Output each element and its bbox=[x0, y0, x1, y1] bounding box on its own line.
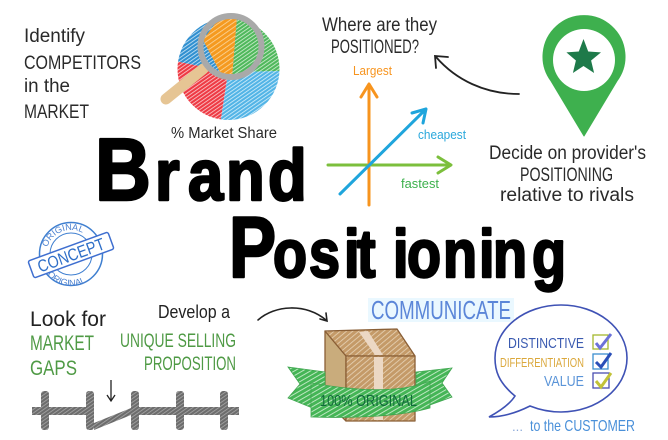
magnifier handle bbox=[166, 69, 203, 99]
bubble text: differentiation: DIFFERENTIATION bbox=[500, 355, 584, 370]
speech bubble bbox=[489, 305, 627, 417]
text: decide on positioning: relative to rivals bbox=[500, 185, 634, 206]
text: identify competitors: Identify bbox=[24, 26, 85, 47]
text: to the customer: ... bbox=[512, 419, 523, 434]
checkbox: value bbox=[593, 373, 611, 388]
text: decide on positioning: Decide on provider's bbox=[489, 143, 646, 164]
text: where are they positioned: POSITIONED? bbox=[331, 37, 419, 58]
stamp: original concept bbox=[28, 222, 114, 286]
bubble text: value: VALUE bbox=[544, 373, 584, 390]
text: decide on positioning: POSITIONING bbox=[520, 165, 613, 186]
text: where are they positioned bbox=[322, 15, 437, 58]
magnifier ring bbox=[200, 16, 262, 77]
text: look for market gaps bbox=[30, 308, 106, 380]
magnifier lens content bbox=[204, 19, 242, 74]
text: identify competitors: MARKET bbox=[24, 102, 89, 123]
title bbox=[95, 120, 566, 296]
icon: down arrow to gap bbox=[107, 380, 115, 401]
text: unique selling proposition: UNIQUE SELLING bbox=[120, 331, 236, 352]
label: market share: % Market Share bbox=[171, 125, 277, 142]
text: communicate: COMMUNICATE bbox=[371, 295, 511, 325]
axis: fastest bbox=[328, 157, 451, 173]
icon: map pin with star bbox=[543, 16, 625, 136]
label: cheapest: cheapest bbox=[418, 127, 466, 142]
title: Brand bbox=[95, 120, 307, 219]
icon: fence with gap bbox=[32, 391, 239, 430]
text: to the customer bbox=[512, 418, 635, 435]
axis: cheapest bbox=[340, 109, 426, 194]
text: look for market gaps: MARKET bbox=[30, 332, 94, 355]
arrow: curved to box bbox=[258, 308, 327, 321]
icon: cardboard box with ribbon bbox=[288, 329, 452, 421]
text: identify competitors: COMPETITORS bbox=[24, 53, 141, 74]
text: unique selling proposition: PROPOSITION bbox=[144, 354, 236, 375]
pie slices bbox=[178, 22, 280, 120]
label: fastest: fastest bbox=[401, 176, 439, 191]
text: where are they positioned: Where are they bbox=[322, 15, 437, 36]
text: communicate: ... bbox=[514, 306, 533, 322]
arrow: pin to question bbox=[435, 56, 519, 94]
text: to the customer: to the CUSTOMER bbox=[530, 418, 635, 435]
text: unique selling proposition: Develop a bbox=[158, 302, 231, 322]
pie chart with magnifying glass bbox=[166, 10, 285, 125]
checkbox: distinctive bbox=[593, 334, 611, 349]
icon: cardboard box with ribbon: 100% ORIGINAL bbox=[320, 393, 417, 410]
text: decide on positioning bbox=[489, 143, 646, 206]
title: Positioning bbox=[229, 199, 566, 296]
box bbox=[325, 329, 415, 421]
text: identify competitors: in the bbox=[24, 76, 70, 97]
text: look for market gaps: GAPS bbox=[30, 357, 77, 380]
text: look for market gaps: Look for bbox=[30, 308, 106, 331]
label: largest: Largest bbox=[353, 64, 392, 78]
positioning axes chart bbox=[328, 84, 451, 205]
ribbon bbox=[288, 367, 325, 412]
checkbox: differentiation bbox=[593, 353, 611, 369]
text: identify competitors bbox=[24, 26, 141, 123]
text: unique selling proposition bbox=[120, 302, 236, 375]
stamp: original concept: ORIGINAL bbox=[48, 272, 86, 286]
bubble text: distinctive: DISTINCTIVE bbox=[508, 335, 584, 352]
stamp: original concept: ORIGINAL bbox=[42, 224, 82, 246]
stamp: original concept: CONCEPT bbox=[35, 235, 107, 276]
axis: largest bbox=[361, 84, 377, 205]
